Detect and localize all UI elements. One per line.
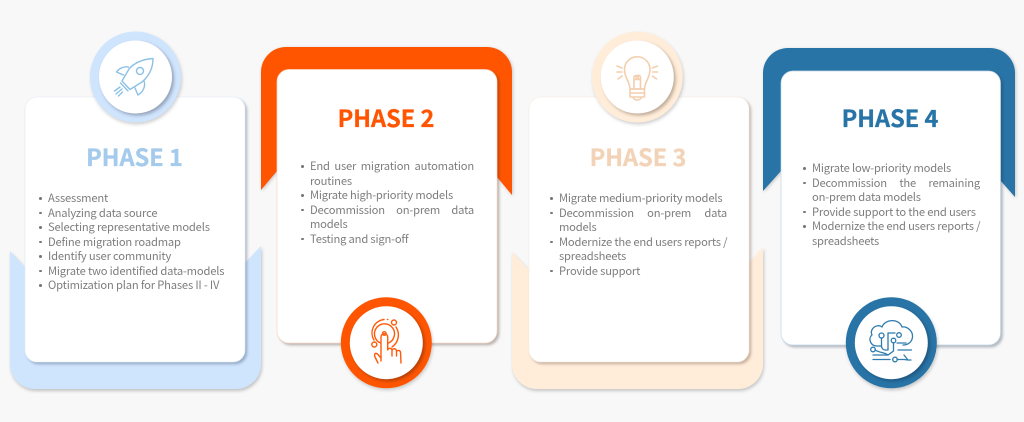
phase 2 bullet list: Migrate high-priority models bbox=[310, 187, 453, 203]
phase 1 bullet list: Selecting representative models bbox=[48, 219, 210, 235]
phase 4 bullet list: Provide support to the end users bbox=[812, 204, 976, 220]
phase 3 backing shape bbox=[512, 247, 763, 389]
panel: phase 3 bbox=[512, 32, 766, 392]
phase 2 bullet list: End user migration automation bbox=[310, 158, 474, 174]
phase 1 bullet list: Optimization plan for Phases II - IV bbox=[48, 277, 219, 293]
phase 3 bullet list: spreadsheets bbox=[559, 248, 626, 264]
phase 4 card bbox=[781, 71, 1000, 345]
phase 2 icon: touch badge bbox=[341, 297, 432, 388]
phase 1 backing shape bbox=[10, 246, 261, 389]
phase 3 bullet list: models bbox=[559, 219, 597, 235]
phase 3 bullet list: Modernize the end users reports / bbox=[559, 234, 727, 250]
phase 3 icon: light bulb badge bbox=[592, 32, 683, 122]
phase 1 bullet list: Analyzing data source bbox=[48, 204, 157, 220]
phase 2 bullet list: Testing and sign-off bbox=[310, 230, 408, 246]
phase 1 bullet list: Assessment bbox=[48, 190, 108, 206]
phase 4 backing shape bbox=[763, 48, 1015, 197]
phase 3 card bbox=[529, 97, 749, 362]
phase 4 bullet list: spreadsheets bbox=[812, 232, 879, 248]
phase 2 card bbox=[277, 70, 497, 343]
panel: phase 2 bbox=[260, 46, 514, 392]
phase 2 bullet list: Decommission on-prem data bbox=[310, 202, 474, 218]
phase 2 bullet list: routines bbox=[310, 172, 352, 188]
phase 3 bullet list: Migrate medium-priority models bbox=[559, 190, 722, 206]
phase 4 bullet list: Decommission the remaining bbox=[812, 174, 980, 190]
phase 1 card bbox=[25, 97, 245, 362]
phase 1 bullet list: Identify user community bbox=[48, 248, 171, 264]
phase 4 bullet list: Migrate low-priority models bbox=[812, 160, 951, 176]
phase 4 bullet list bbox=[803, 160, 980, 248]
phase 4 bullet list: Modernize the end users reports / bbox=[812, 218, 980, 234]
phase 4 icon: cloud circuit badge bbox=[846, 297, 937, 388]
panel: phase 1 bbox=[10, 32, 264, 392]
phase 3 bullet list bbox=[550, 190, 728, 278]
phase 2 bullet list bbox=[301, 158, 474, 246]
phase 4 heading: PHASE 4 bbox=[842, 100, 938, 134]
phase 3 bullet list: Provide support bbox=[559, 262, 640, 278]
phase 1 bullet list bbox=[39, 190, 224, 293]
phase 1 heading: PHASE 1 bbox=[86, 139, 183, 173]
phase 4 bullet list: on-prem data models bbox=[812, 189, 921, 205]
phase 3 bullet list: Decommission on-prem data bbox=[559, 204, 727, 220]
phase 3 heading: PHASE 3 bbox=[590, 139, 686, 173]
phase 2 heading: PHASE 2 bbox=[338, 100, 434, 134]
phase 2 backing shape bbox=[261, 47, 512, 195]
phase 2 bullet list: models bbox=[310, 216, 348, 232]
phase 1 bullet list: Define migration roadmap bbox=[48, 234, 181, 250]
phase 1 bullet list: Migrate two identified data-models bbox=[48, 262, 224, 278]
panel: phase 4 bbox=[762, 48, 1018, 392]
phase 1 icon: rocket badge bbox=[90, 32, 181, 122]
